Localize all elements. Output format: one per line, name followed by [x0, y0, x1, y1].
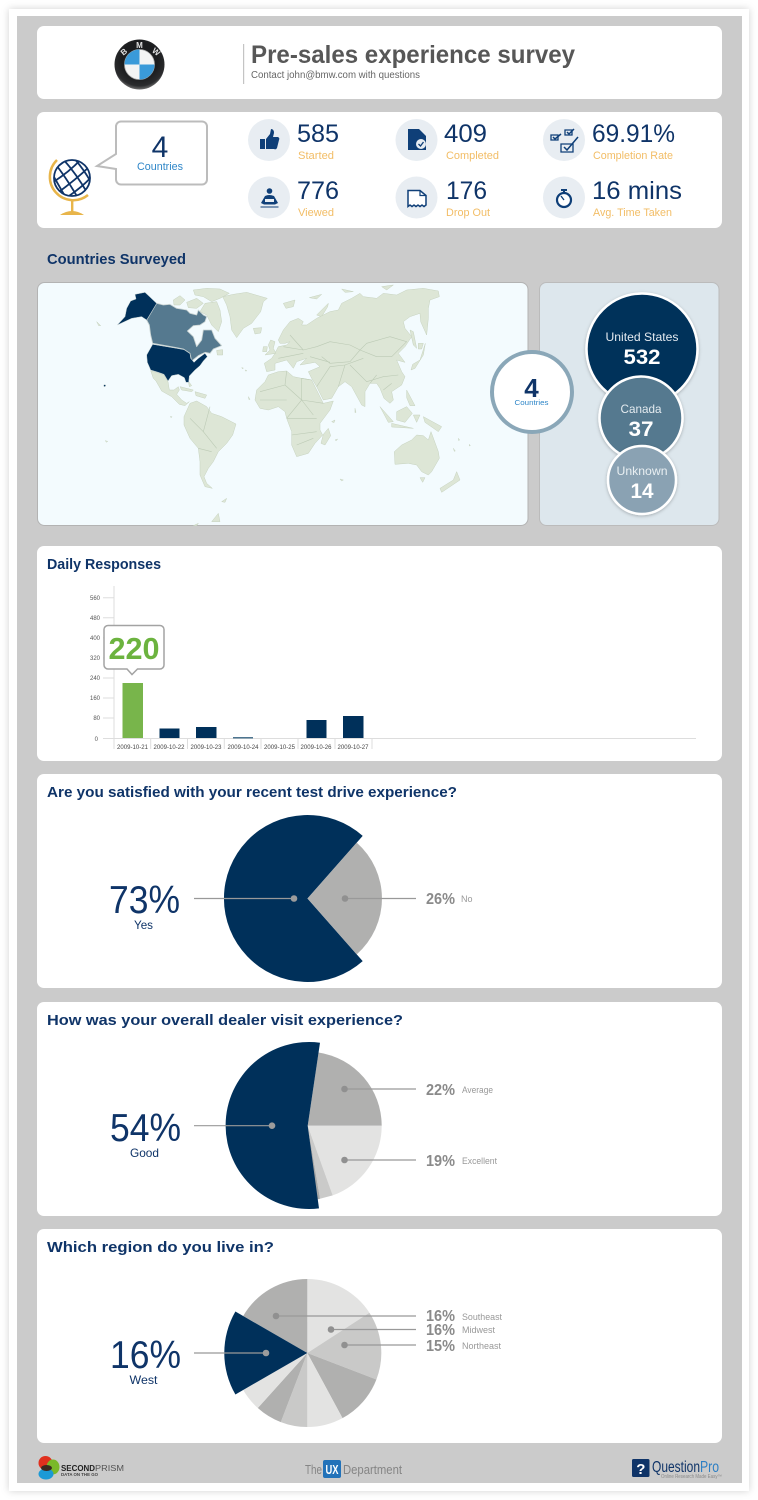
- bar chart: 2009-10-21: [117, 745, 149, 751]
- bubble: United States: [586, 294, 698, 404]
- heading: How was your overall dealer visit experience?: [47, 1012, 403, 1029]
- stat: completion rate: Completion Rate: [593, 150, 673, 162]
- footer logo: QuestionPro: [632, 1459, 722, 1480]
- bubble: Canada: [600, 376, 682, 460]
- label: excellent: Excellent: [462, 1156, 497, 1166]
- bar chart: 240: [90, 676, 101, 682]
- label: average: Average: [462, 1085, 493, 1095]
- panel: region question: [37, 1229, 722, 1443]
- label: midwest: 16%: [426, 1322, 455, 1339]
- label: southeast: 16%: [426, 1308, 455, 1325]
- bubble: total countries: [492, 352, 572, 432]
- title: Pre-sales experience survey: [251, 41, 575, 69]
- pie chart: [194, 1279, 416, 1427]
- label: midwest: Midwest: [462, 1325, 495, 1335]
- map: Canada highlighted: [147, 303, 222, 361]
- icon: BMW logo: M: [136, 41, 143, 50]
- bar chart: 560: [90, 596, 101, 602]
- bar chart: 2009-10-24: [228, 745, 259, 751]
- label: no: No: [461, 894, 473, 904]
- label: excellent: 19%: [426, 1153, 455, 1170]
- callout: countries count: Countries: [137, 161, 183, 173]
- label: no: [426, 891, 473, 908]
- icon: BMW logo: W: [150, 46, 162, 58]
- stat: average time: Avg. Time Taken: [593, 207, 672, 219]
- footer logo: The UX Department: The: [305, 1463, 322, 1477]
- pie chart: [194, 815, 416, 982]
- footer logo: QuestionPro: Online Research Made Easy™: [661, 1474, 722, 1480]
- label: good: 54%: [110, 1107, 181, 1150]
- heading: Daily Responses: [47, 556, 161, 573]
- label: average: 22%: [426, 1082, 455, 1099]
- label: northeast: [426, 1338, 501, 1355]
- bar chart: 80: [93, 716, 101, 722]
- footer logo: QuestionPro: ?: [636, 1461, 645, 1478]
- panel: summary stats: [37, 112, 722, 228]
- footer logo: The UX Department: Department: [343, 1463, 402, 1477]
- contact line: Contact john@bmw.com with questions: [251, 70, 420, 81]
- heading: Which region do you live in?: [47, 1239, 274, 1256]
- bar chart: 2009-10-23: [190, 745, 222, 751]
- footer logo: QuestionPro: Pro: [700, 1459, 719, 1476]
- stat: viewed: [248, 176, 339, 219]
- bubble: total countries: 4: [524, 373, 539, 403]
- footer logo: QuestionPro: Question: [652, 1459, 700, 1476]
- panel: daily responses: [37, 546, 722, 761]
- panel: world map: [38, 282, 528, 526]
- heading: countries surveyed: Countries Surveyed: [47, 251, 186, 268]
- callout: peak value: [104, 626, 164, 674]
- pie chart: [194, 1042, 416, 1209]
- bar chart: 480: [90, 616, 101, 622]
- bar chart: 160: [90, 696, 101, 702]
- bar chart: 2009-10-26: [300, 745, 332, 751]
- footer logo: The UX Department: UX: [326, 1463, 339, 1477]
- label: southeast: Southeast: [462, 1312, 502, 1322]
- bubble: Unknown: Unknown: [616, 464, 668, 478]
- stat: started: Started: [298, 150, 334, 162]
- callout: countries count: [97, 122, 207, 184]
- stat: completion rate: [543, 119, 675, 162]
- bar chart: 0: [95, 737, 99, 743]
- map: country borders: [190, 335, 407, 452]
- bubble: United States: United States: [606, 330, 678, 344]
- label: southeast: [426, 1308, 502, 1325]
- bar chart: 320: [90, 656, 101, 662]
- label: average: [426, 1082, 493, 1099]
- stat: drop out: Drop Out: [446, 207, 490, 219]
- panel: country breakdown: [540, 282, 719, 526]
- bubble: United States: 532: [624, 346, 660, 369]
- panel: dealer visit question: [37, 1002, 722, 1216]
- icon: BMW logo: [114, 40, 164, 90]
- label: midwest: [426, 1322, 495, 1339]
- callout: countries count: 4: [152, 131, 168, 164]
- bar chart: [90, 586, 696, 751]
- panel: test drive question: [37, 774, 722, 988]
- panel: header: [37, 26, 722, 99]
- stat: average time: [543, 176, 682, 219]
- label: excellent: [426, 1153, 497, 1170]
- stat: viewed: Viewed: [298, 207, 334, 219]
- footer logo: Second Prism: DATA ON THE GO: [61, 1472, 98, 1477]
- label: no: 26%: [426, 891, 455, 908]
- bubble: total countries: Countries: [514, 398, 549, 407]
- bubble: Unknown: 14: [630, 480, 654, 503]
- map: United States highlighted: [104, 292, 207, 387]
- map: land masses: [97, 285, 470, 526]
- footer logo: Second Prism: PRISM: [95, 1464, 124, 1473]
- stat: viewed: 776: [297, 177, 339, 205]
- stat: completed: 409: [444, 120, 487, 148]
- label: northeast: 15%: [426, 1338, 455, 1355]
- bubble: Canada: Canada: [620, 402, 662, 416]
- label: yes: 73%: [109, 879, 180, 922]
- stat: started: 585: [297, 120, 339, 148]
- stat: started: [248, 119, 339, 162]
- label: yes: Yes: [134, 918, 153, 932]
- stat: completion rate: 69.91%: [592, 120, 675, 148]
- footer logo: Second Prism: [38, 1456, 124, 1480]
- stat: drop out: 176: [446, 177, 487, 205]
- label: west: West: [130, 1373, 158, 1387]
- bubble: Canada: 37: [628, 418, 654, 441]
- footer logo: The UX Department: [305, 1460, 402, 1478]
- bubble: Unknown: [608, 446, 676, 514]
- bar chart: 2009-10-27: [338, 745, 369, 751]
- bar chart: 2009-10-22: [154, 745, 185, 751]
- heading: Are you satisfied with your recent test drive experience?: [47, 784, 457, 801]
- label: good: Good: [130, 1146, 159, 1160]
- footer logo: Second Prism: SECOND: [61, 1464, 95, 1473]
- stat: average time: 16 mins: [592, 177, 682, 205]
- label: west: 16%: [110, 1334, 181, 1377]
- stat: completed: Completed: [446, 150, 499, 162]
- bar chart: 2009-10-25: [264, 745, 296, 751]
- stat: completed: [396, 119, 499, 162]
- icon: BMW logo: B: [119, 47, 129, 57]
- callout: peak value: 220: [108, 631, 160, 666]
- stat: drop out: [396, 176, 490, 219]
- label: northeast: Northeast: [462, 1341, 501, 1351]
- icon: globe: [48, 159, 91, 215]
- bar chart: 400: [90, 636, 101, 642]
